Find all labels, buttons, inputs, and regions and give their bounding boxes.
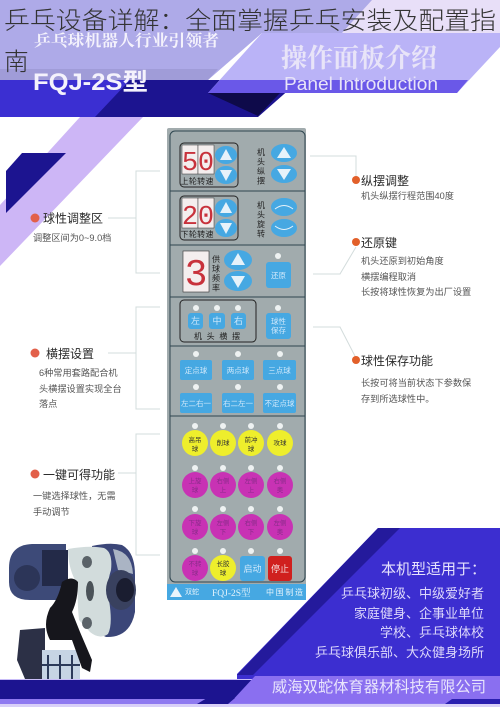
banner heading: panel introduction (281, 43, 438, 94)
magenta ball buttons row 2: 左侧 (216, 520, 230, 527)
panel body (167, 128, 306, 600)
bottom right blue block (237, 528, 500, 680)
ball save button (266, 305, 291, 339)
bottom row of ball buttons with start and stop: 停止 (271, 563, 289, 574)
magenta ball buttons row 2: 下旋 (188, 520, 202, 527)
robot vents (82, 556, 92, 568)
magenta ball buttons row 1: 上 (220, 485, 227, 494)
suitable users text: 乒乓球初级、中级爱好者 (341, 586, 484, 601)
head sweep group (180, 300, 256, 342)
magenta ball buttons row 2: 奥 (277, 527, 284, 536)
magenta ball buttons row 2: 下 (220, 528, 227, 536)
callout: sweep settings: 落点 (39, 398, 57, 409)
ball save button: 球性 (271, 317, 286, 326)
robot upper right highlight (113, 549, 133, 574)
callout: one-key function: 一键选择球性，无需 (33, 490, 116, 501)
magenta ball buttons row 2: 右侧 (244, 520, 258, 527)
sweep mode buttons: 两点球 (227, 365, 250, 375)
yellow ball buttons: 球 (192, 444, 199, 453)
bottom row of ball buttons with start and stop: 不转 (188, 561, 202, 568)
magenta ball buttons row 2: 球 (192, 527, 199, 536)
footer logo and model text: FQJ-2S型 (212, 587, 251, 599)
head rotation control: 机 (257, 201, 265, 210)
title: 乒乓设备详解：全面掌握乒乓安装及配置指 (4, 7, 496, 35)
title (4, 7, 496, 76)
ball save button: 保存 (271, 325, 286, 335)
lower wheel speed display (180, 196, 238, 240)
reset button (266, 253, 291, 288)
callout: sweep settings: 6种常用套路配合机 (39, 367, 118, 378)
head sweep group: 机头横摆 (194, 331, 240, 341)
magenta ball buttons row 2: 左侧 (274, 520, 286, 527)
reset button: 还原 (271, 270, 286, 280)
yellow ball buttons: 前冲 (244, 437, 258, 444)
callout: ball save function (352, 354, 471, 404)
connector lines: left brackets (108, 171, 160, 555)
callout: one-key function (30, 467, 116, 517)
lower wheel speed display: 0 (198, 203, 214, 233)
header banner background (0, 0, 500, 117)
connector lines: right callouts (310, 156, 356, 358)
callout: ball property adjustment: 调整区间为0~9.0档 (33, 232, 111, 243)
title: 南 (4, 49, 29, 76)
serve frequency display: 频 (212, 273, 220, 283)
callout: ball save function: 球性保存功能 (361, 354, 433, 368)
magenta ball buttons row 1: 左侧 (244, 478, 258, 485)
suitable users text (315, 561, 486, 660)
magenta ball buttons row 1: 右侧 (216, 478, 230, 485)
bottom row of ball buttons with start and stop: 球 (220, 568, 227, 577)
callout: pitch adjustment: 纵摆调整 (361, 173, 409, 188)
suitable users text: 家庭健身、企事业单位 (354, 606, 484, 621)
callout: ball property adjustment: 球性调整区 (43, 210, 103, 226)
head rotation control: 转 (257, 228, 265, 238)
banner heading: panel introduction: Panel Introduction (284, 73, 438, 94)
banner heading: panel introduction: 操作面板介绍 (281, 43, 437, 73)
upper wheel speed display (180, 143, 238, 187)
magenta ball buttons row 1 (182, 465, 293, 498)
callout: reset key (352, 236, 471, 297)
banner heading: left (33, 31, 219, 96)
callout: reset key: 横摆编程取消 (361, 271, 416, 282)
head rotation control: 头 (257, 210, 265, 220)
footer logo and model text: 中国制造 (266, 587, 303, 597)
suitable users text: 乒乓球俱乐部、大众健身场所 (315, 645, 484, 660)
callout: reset key: 还原键 (361, 236, 397, 250)
suitable users text: 本机型适用于： (381, 561, 486, 578)
callout: sweep settings: 头横摆设置实现全台 (39, 383, 122, 394)
bottom row of ball buttons with start and stop: 长胶 (216, 561, 230, 568)
magenta ball buttons row 1: 奥 (277, 485, 284, 494)
callout: pitch adjustment (352, 173, 454, 201)
bottom bands (0, 676, 500, 707)
yellow ball buttons: 攻球 (274, 438, 287, 447)
robot back housing (9, 544, 66, 600)
serve frequency display: 供 (212, 255, 220, 264)
callout: sweep settings: 横摆设置 (46, 347, 94, 361)
head pitch control: 摆 (257, 176, 265, 186)
callout: one-key function: 一键可得功能 (43, 467, 115, 482)
magenta ball buttons row 2 (182, 506, 293, 540)
robot motor block (17, 628, 45, 679)
head sweep group: 中 (212, 315, 222, 326)
callout: ball property adjustment (30, 210, 111, 243)
lower wheel speed display: 2 (182, 203, 198, 233)
left diagonal decoration (0, 117, 143, 266)
banner heading: left: 乒乓球机器人行业引领者 (34, 31, 219, 50)
head sweep group: 右 (234, 315, 243, 326)
footer logo and model text: 双蛇 (185, 587, 199, 596)
magenta ball buttons row 1: 右侧 (274, 478, 286, 485)
callout: reset key: 长按将球性恢复为出厂设置 (361, 286, 471, 297)
sweep mode buttons: 定点球 (185, 365, 208, 375)
yellow ball buttons: 球 (248, 444, 255, 453)
callout: ball save function: 存到所选球性中。 (361, 393, 434, 404)
callout: ball save function: 长按可将当前状态下参数保 (361, 377, 471, 388)
upper wheel speed display: 上轮转速 (180, 176, 214, 186)
callout: pitch adjustment: 机头纵摆行程范围40度 (361, 190, 454, 201)
serve frequency display: 3 (185, 254, 207, 297)
control panel (167, 128, 306, 600)
banner heading: left: FQJ-2S型 (33, 69, 148, 96)
head pitch control (257, 144, 297, 186)
head pitch control: 纵 (257, 167, 265, 176)
callout: sweep settings (30, 347, 122, 409)
panel footer strip (167, 584, 306, 600)
company name: 威海双蛇体育器材科技有限公司 (272, 679, 486, 696)
sweep mode buttons: 右二左一 (223, 398, 253, 408)
sweep mode buttons: 不定点球 (264, 398, 295, 408)
robot light shell (68, 547, 111, 637)
upper wheel speed display: 5 (182, 149, 198, 179)
panel outline and dividers (170, 131, 305, 582)
robot dark shell (92, 544, 135, 637)
head rotation control (257, 198, 297, 238)
yellow ball buttons: 削球 (216, 438, 230, 447)
head pitch control: 头 (257, 156, 265, 166)
sweep mode buttons (180, 351, 296, 413)
bottom row of ball buttons with start and stop: 启动 (243, 563, 262, 574)
bottom row of ball buttons with start and stop: 球 (192, 568, 199, 577)
robot illustration (9, 544, 136, 679)
head pitch control: 机 (257, 148, 265, 157)
head rotation control: 旋 (257, 219, 265, 229)
yellow ball buttons (182, 423, 293, 456)
bottom row of ball buttons with start and stop (182, 548, 292, 581)
upper wheel speed display: 0 (198, 149, 214, 179)
serve frequency display: 率 (212, 282, 220, 292)
serve frequency display: 球 (212, 264, 220, 274)
magenta ball buttons row 2: 下 (248, 528, 255, 536)
sweep mode buttons: 三点球 (268, 365, 291, 375)
sweep mode buttons: 左二右一 (181, 398, 211, 408)
suitable users text: 学校、乒乓球体校 (380, 625, 484, 640)
robot ball hopper (42, 650, 80, 679)
robot cable and neck (46, 578, 92, 672)
callout: one-key function: 手动调节 (33, 506, 70, 517)
serve frequency display (183, 250, 252, 297)
magenta ball buttons row 1: 球 (192, 485, 199, 494)
head sweep group: 左 (191, 315, 200, 326)
lower wheel speed display: 下轮转速 (180, 229, 214, 239)
magenta ball buttons row 1: 上旋 (188, 478, 202, 485)
callout: reset key: 机头还原到初始角度 (361, 255, 444, 266)
footer logo and model text (170, 587, 303, 599)
magenta ball buttons row 1: 上 (248, 485, 255, 494)
yellow ball buttons: 高吊 (188, 437, 202, 444)
robot nozzle ring (106, 570, 136, 610)
